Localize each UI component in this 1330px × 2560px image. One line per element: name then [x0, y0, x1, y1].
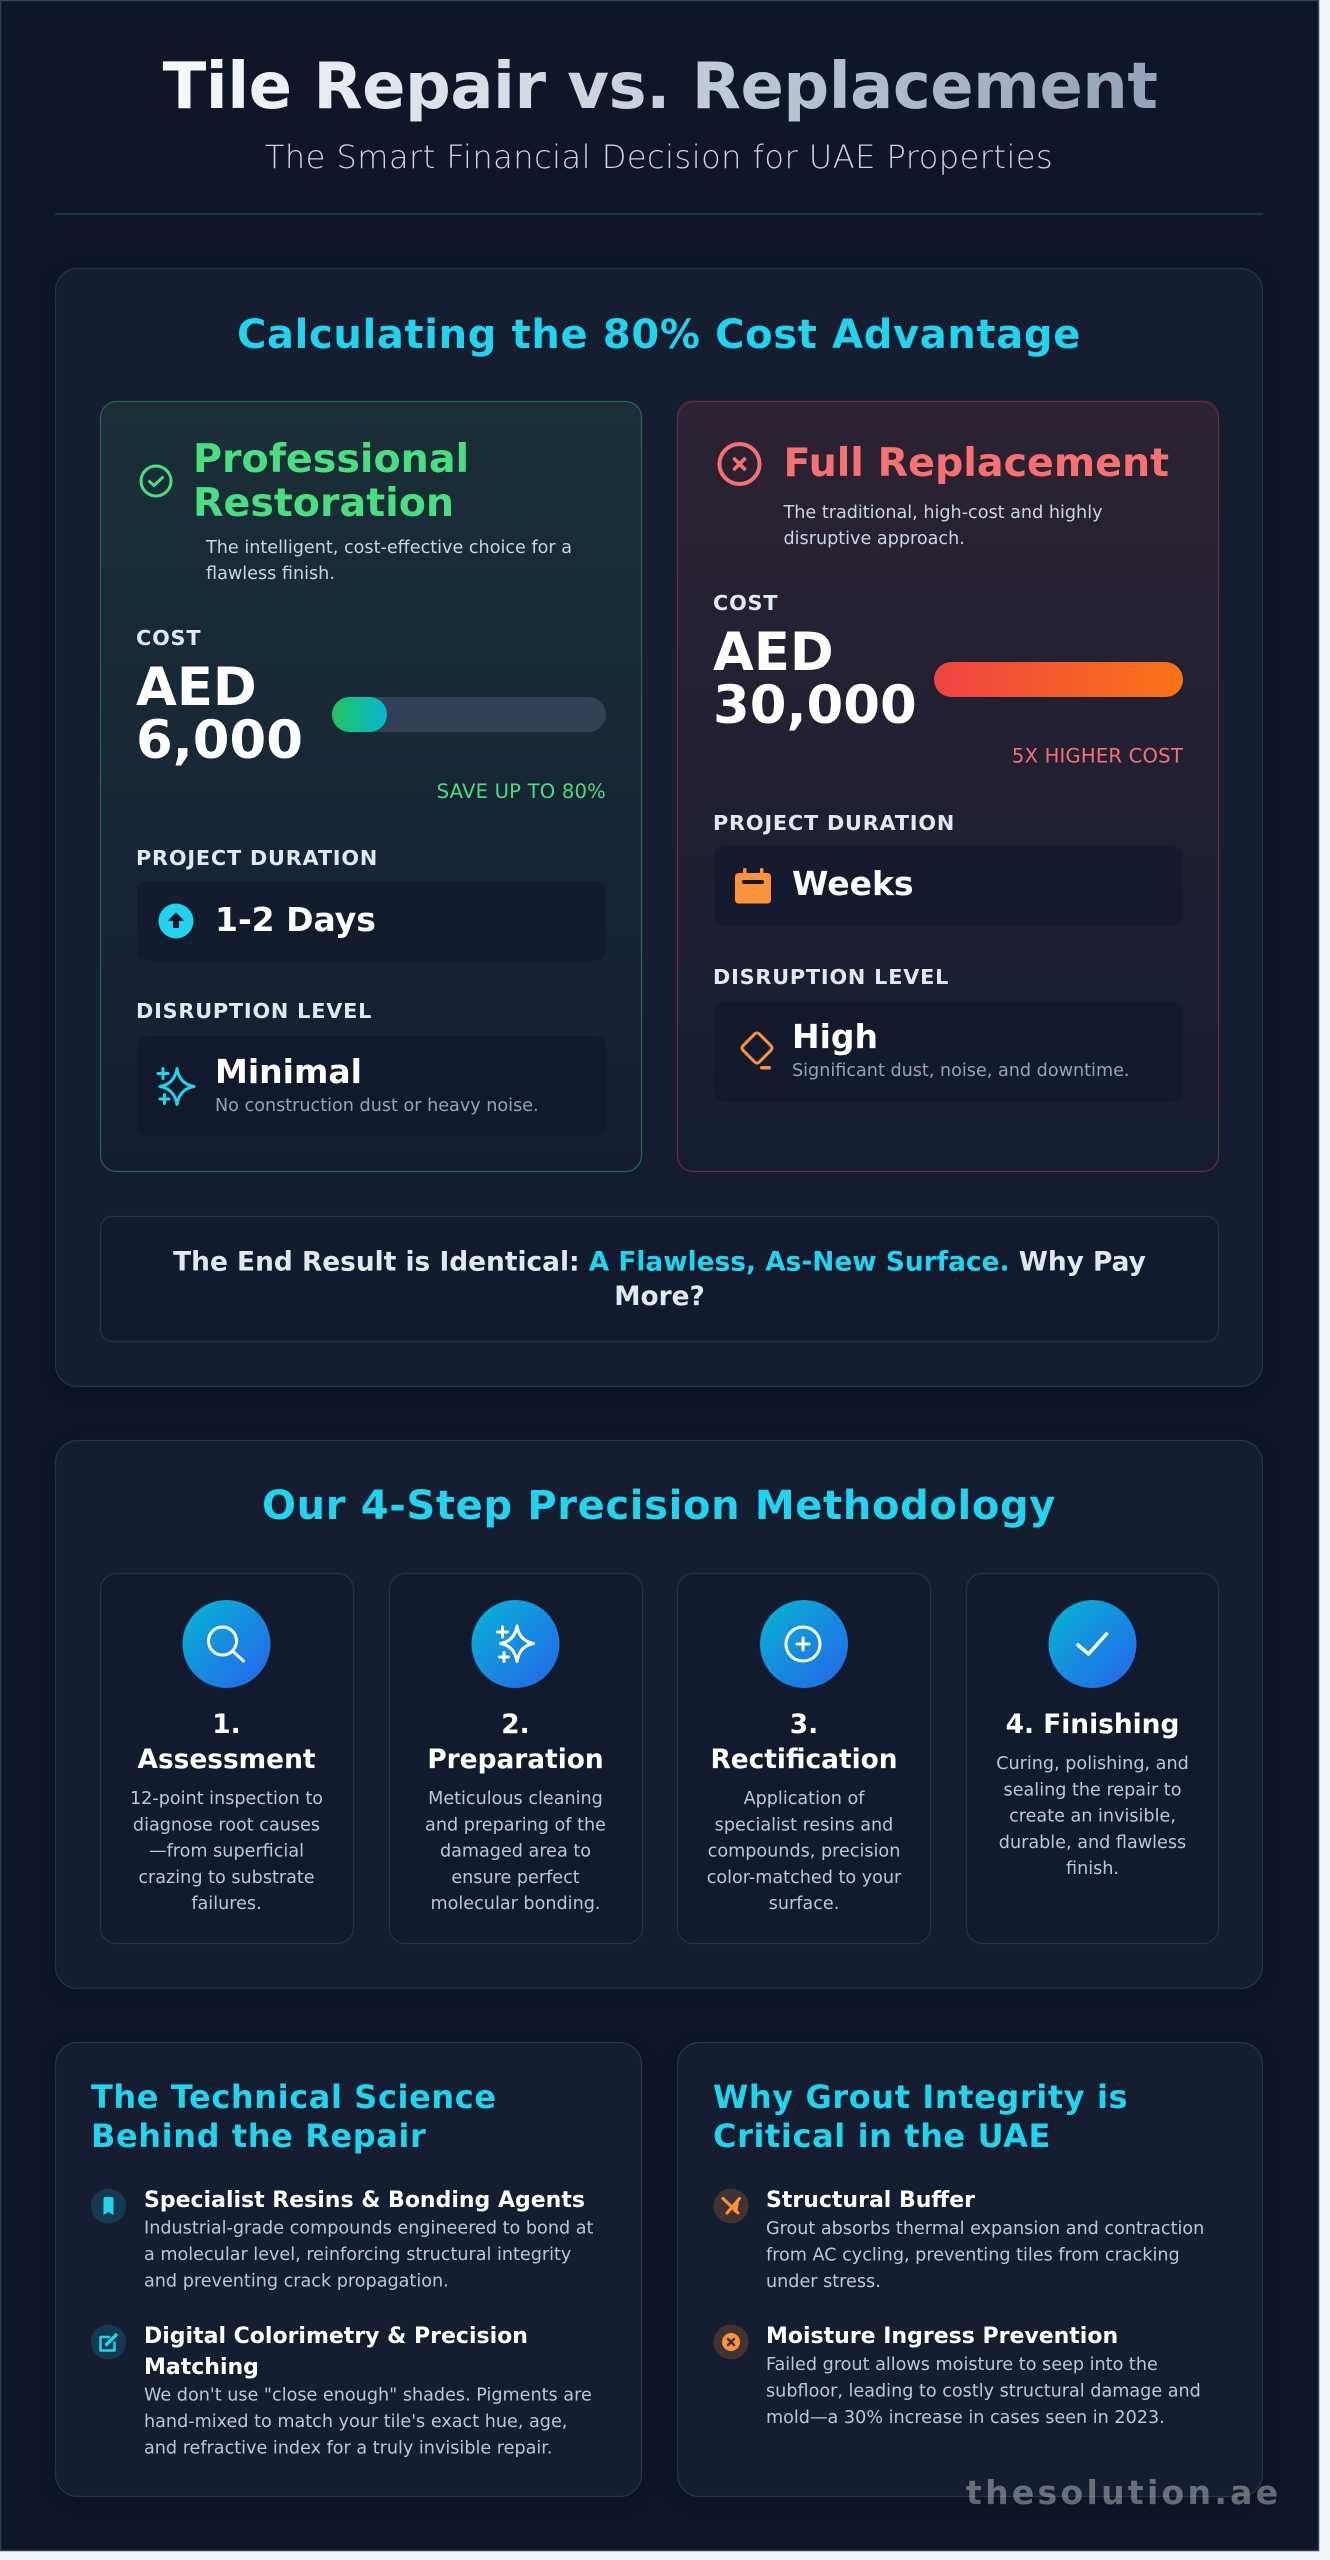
card title: Full Replacement [784, 440, 1169, 486]
item: digital colorimetry [91, 2324, 592, 2458]
disruption box [714, 1001, 1183, 1102]
item description: We don't use "close enough" shades. Pigments are [144, 2386, 592, 2406]
step description: create an invisible, [1009, 1807, 1176, 1827]
duration box [137, 881, 606, 961]
icon: magnifier [182, 1600, 270, 1688]
step title: 1. [212, 1709, 241, 1740]
step title: 2. [501, 1709, 530, 1740]
step 2 [390, 1574, 642, 1944]
step 3 [678, 1574, 930, 1944]
item description: from AC cycling, preventing tiles from cracking [766, 2246, 1180, 2266]
disruption note: No construction dust or heavy noise. [215, 1096, 539, 1116]
label: disruption level: DISRUPTION LEVEL [713, 965, 949, 989]
step description: specialist resins and [715, 1815, 893, 1835]
step description: 12-point inspection to [130, 1789, 323, 1809]
label: disruption level: DISRUPTION LEVEL [136, 999, 372, 1023]
panel: cost advantage [56, 268, 1262, 1386]
card title: Professional [193, 436, 469, 482]
watermark: thesolution.ae [966, 2473, 1281, 2512]
step description: —from superficial [149, 1842, 304, 1862]
step description: sealing the repair to [1004, 1780, 1181, 1800]
heading: technical science: The Technical Science [91, 2078, 497, 2116]
icon: calendar [735, 868, 771, 904]
cost value: AED [713, 622, 834, 683]
step description: and preparing of the [425, 1815, 606, 1835]
icon: plus circle [760, 1600, 848, 1688]
disruption value: High [792, 1017, 878, 1056]
icon: check [1048, 1600, 1136, 1688]
step description: compounds, precision [708, 1842, 900, 1862]
savings note: SAVE UP TO 80% [437, 780, 606, 803]
header [163, 50, 1157, 176]
callout: end result: More? [614, 1281, 705, 1312]
item title: Moisture Ingress Prevention [766, 2324, 1118, 2349]
label: cost: COST [713, 591, 778, 615]
label: cost: COST [136, 626, 201, 650]
step title: 3. [790, 1709, 818, 1740]
item title: Structural Buffer [766, 2188, 975, 2213]
icon: edit [91, 2324, 126, 2360]
cost bar [332, 697, 606, 732]
step title: Preparation [427, 1744, 604, 1775]
callout: end result: The End Result is Identical: A Flawless, As-New Surface. Why Pay [173, 1246, 1146, 1278]
duration value: 1-2 Days [215, 900, 376, 939]
step description: Meticulous cleaning [428, 1789, 603, 1809]
subtitle: The Smart Financial Decision for UAE Properties [265, 138, 1053, 176]
step description: ensure perfect [451, 1868, 580, 1888]
step title: Assessment [138, 1744, 316, 1775]
cost value: 30,000 [713, 675, 917, 736]
cost value: AED [136, 657, 257, 718]
step 4 [966, 1574, 1218, 1944]
card title: Restoration [193, 480, 454, 526]
item description: under stress. [766, 2272, 881, 2292]
item description: Failed grout allows moisture to seep into the [766, 2355, 1158, 2375]
card description: The intelligent, cost-effective choice for a [205, 538, 572, 558]
item description: Grout absorbs thermal expansion and contraction [766, 2219, 1204, 2239]
icon: x badge [714, 2324, 748, 2360]
title: Tile Repair vs. Replacement [163, 50, 1157, 124]
duration value: Weeks [792, 864, 914, 903]
step 1 [100, 1574, 354, 1944]
item description: and preventing crack propagation. [144, 2272, 449, 2292]
icon: bookmark [91, 2188, 126, 2224]
step description: Application of [744, 1789, 865, 1809]
heading: cost advantage: Calculating the 80% Cost Advantage [237, 312, 1081, 358]
card: full replacement [678, 402, 1218, 1172]
heading: grout integrity: Critical in the UAE [713, 2117, 1051, 2155]
item: moisture prevention [714, 2324, 1201, 2428]
label: project duration: PROJECT DURATION [713, 811, 955, 835]
panel: grout integrity [678, 2042, 1262, 2496]
icon: x circle [720, 444, 760, 484]
icon: sparkles [158, 1068, 194, 1104]
item description: mold—a 30% increase in cases seen in 2023. [766, 2408, 1165, 2428]
item description: and refractive index for a truly invisible repair. [144, 2438, 553, 2458]
card description: The traditional, high-cost and highly [782, 503, 1102, 523]
callout: end result [100, 1216, 1218, 1342]
disruption box [137, 1036, 606, 1137]
label: project duration: PROJECT DURATION [136, 846, 378, 870]
icon: up arrow [158, 904, 194, 938]
heading: grout integrity: Why Grout Integrity is [713, 2078, 1128, 2116]
item title: Digital Colorimetry & Precision [144, 2324, 528, 2349]
heading: technical science: Behind the Repair [91, 2117, 426, 2155]
card description: flawless finish. [206, 564, 335, 584]
step description: crazing to substrate [138, 1868, 315, 1888]
step description: failures. [191, 1894, 262, 1914]
step description: color-matched to your [707, 1868, 902, 1888]
panel: technical science [56, 2042, 642, 2496]
icon: cracked tile [714, 2188, 748, 2224]
step description: surface. [769, 1894, 839, 1914]
step description: Curing, polishing, and [996, 1754, 1189, 1774]
step title: Rectification [710, 1744, 898, 1775]
cost note: 5X HIGHER COST [1012, 744, 1184, 768]
panel: methodology [56, 1440, 1262, 1988]
item description: hand-mixed to match your tile's exact hue, age, [144, 2412, 567, 2432]
icon: tilted tile [741, 1032, 773, 1070]
card description: disruptive approach. [784, 529, 965, 549]
step description: diagnose root causes [133, 1815, 320, 1835]
step title: 4. Finishing [1006, 1709, 1179, 1740]
item: specialist resins [91, 2188, 594, 2292]
cost bar [934, 662, 1183, 697]
heading: methodology: Our 4-Step Precision Methodology [262, 1483, 1056, 1529]
item: structural buffer [714, 2188, 1204, 2292]
step description: damaged area to [440, 1842, 591, 1862]
duration box [714, 846, 1183, 926]
icon: check circle [141, 466, 171, 496]
disruption note: Significant dust, noise, and downtime. [792, 1061, 1130, 1081]
step description: molecular bonding. [431, 1894, 600, 1914]
card: professional restoration [100, 402, 642, 1172]
cost value: 6,000 [136, 710, 303, 771]
item description: Industrial-grade compounds engineered to bond at [144, 2218, 594, 2238]
icon: sparkles [472, 1600, 560, 1688]
step description: durable, and flawless [999, 1833, 1186, 1853]
step description: finish. [1066, 1859, 1119, 1879]
item description: subfloor, leading to costly structural damage and [766, 2382, 1201, 2402]
item description: a molecular level, reinforcing structural integrity [144, 2245, 571, 2265]
disruption value: Minimal [215, 1052, 362, 1091]
item title: Matching [144, 2355, 259, 2380]
item title: Specialist Resins & Bonding Agents [144, 2188, 585, 2213]
